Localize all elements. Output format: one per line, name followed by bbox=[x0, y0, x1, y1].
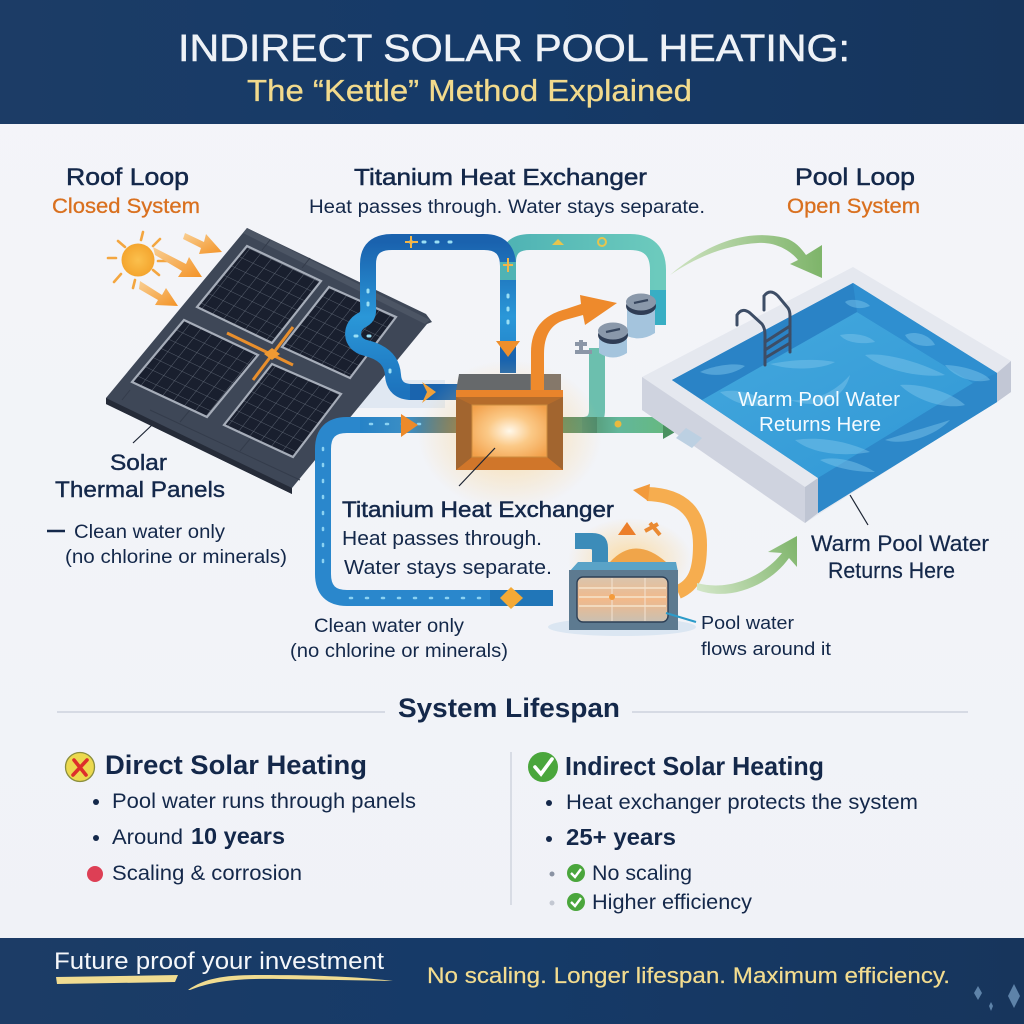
note: pool water flows around it: flows around it bbox=[701, 639, 831, 659]
ripples bbox=[700, 300, 990, 472]
pipe bbox=[575, 533, 608, 562]
slogan: No scaling. Longer lifespan. Maximum efficiency. bbox=[427, 963, 950, 988]
panel bbox=[224, 364, 341, 457]
bullet: 25+ years bbox=[566, 824, 676, 850]
canister large bbox=[626, 294, 656, 338]
heat icons bbox=[618, 522, 636, 535]
label: warm pool water: Returns Here bbox=[828, 558, 955, 583]
sparkles bbox=[974, 984, 1020, 1011]
roof bbox=[106, 228, 432, 494]
shadow bbox=[548, 618, 696, 636]
swoosh underline bbox=[56, 975, 393, 990]
swimming pool: Returns Here bbox=[759, 414, 881, 436]
bullet bbox=[93, 823, 285, 849]
text block: titanium heat exchanger bbox=[342, 497, 614, 579]
green arrow to pool from unit bbox=[697, 536, 797, 594]
box front bbox=[456, 390, 563, 470]
note: clean water only (middle) bbox=[290, 616, 508, 662]
arrow bbox=[496, 341, 520, 357]
text block: titanium heat exchanger: Heat passes through. bbox=[342, 528, 542, 550]
note: clean water only (middle): Clean water only bbox=[314, 616, 465, 637]
label: warm pool water bbox=[811, 531, 989, 583]
panel: indirect solar heating bbox=[528, 751, 918, 914]
icon: red x bbox=[66, 752, 94, 782]
panel connector bbox=[227, 327, 293, 380]
teal feed into outflow bbox=[582, 348, 597, 425]
pointer line: pool bbox=[850, 495, 868, 525]
note: pool water flows around it bbox=[701, 613, 831, 659]
small heat exchanger unit bbox=[548, 484, 700, 636]
heading: Direct Solar Heating bbox=[105, 750, 367, 780]
green arrow into pool bbox=[670, 235, 822, 278]
heading: Indirect Solar Heating bbox=[565, 751, 824, 781]
heading: roof loop: Closed System bbox=[52, 195, 200, 218]
panel: direct solar heating bbox=[66, 750, 416, 885]
arrow bbox=[500, 587, 523, 609]
bullet: Scaling & corrosion bbox=[112, 862, 302, 885]
reflection under roof bbox=[352, 380, 445, 408]
bullet: Around bbox=[112, 826, 183, 849]
label: warm pool water: Warm Pool Water bbox=[811, 531, 989, 556]
inlet plate bbox=[676, 428, 702, 448]
note: clean water only: (no chlorine or minerals) bbox=[65, 547, 287, 568]
valve bbox=[575, 340, 590, 352]
blue pipe bbox=[353, 242, 508, 392]
bullet: Pool water runs through panels bbox=[112, 790, 416, 813]
label: solar thermal panels: Thermal Panels bbox=[55, 477, 225, 502]
text block: titanium heat exchanger: Water stays separate. bbox=[344, 557, 552, 579]
heat glow bbox=[568, 518, 692, 602]
heading: system lifespan: System Lifespan bbox=[398, 693, 620, 723]
heading: pool loop bbox=[787, 164, 920, 218]
filter canisters bbox=[575, 294, 656, 358]
heat exchanger box bbox=[456, 374, 563, 470]
heading: titanium heat exchanger: Titanium Heat Exchanger bbox=[354, 164, 647, 190]
text block: titanium heat exchanger: Titanium Heat Exchanger bbox=[342, 497, 614, 522]
deck bbox=[642, 267, 1011, 523]
orange return arrow bbox=[647, 494, 700, 592]
bullet: Heat exchanger protects the system bbox=[566, 791, 918, 814]
panel bbox=[132, 320, 258, 417]
panel bbox=[197, 246, 321, 343]
heat glow bbox=[418, 360, 602, 510]
arrow bbox=[422, 382, 436, 403]
bullet: No scaling bbox=[592, 862, 692, 885]
icon: green check bbox=[528, 752, 558, 782]
outflow pipe to pool bbox=[563, 413, 684, 439]
body bbox=[569, 562, 678, 572]
heading: titanium heat exchanger bbox=[309, 164, 705, 218]
water label: Warm Pool Water bbox=[738, 389, 900, 411]
panel bbox=[282, 287, 396, 378]
bullet: Higher efficiency bbox=[592, 891, 753, 914]
bullet bbox=[550, 862, 692, 885]
heat fins bbox=[610, 548, 666, 562]
heading: titanium heat exchanger: Heat passes through. Water stays separate. bbox=[309, 197, 705, 218]
heading: roof loop: Roof Loop bbox=[66, 164, 189, 191]
heading: pool loop: Open System bbox=[787, 195, 920, 218]
lower blue pipe bbox=[323, 414, 553, 609]
box top bbox=[456, 374, 561, 391]
header banner bbox=[0, 0, 1024, 124]
swimming pool bbox=[642, 267, 1011, 523]
note: clean water only: Clean water only bbox=[74, 522, 226, 543]
label: solar thermal panels: Solar bbox=[110, 450, 167, 475]
callout line bbox=[666, 613, 696, 622]
subtitle: The “Kettle” Method Explained bbox=[247, 73, 692, 108]
pointer line: heat exchanger bbox=[459, 448, 495, 486]
note: pool water flows around it: Pool water bbox=[701, 613, 794, 633]
connector centre bbox=[264, 348, 280, 360]
upper blue pipe with teal return bbox=[353, 236, 658, 403]
heading: pool loop: Pool Loop bbox=[795, 164, 915, 191]
ladder bbox=[737, 292, 790, 365]
icon: sun bbox=[108, 232, 167, 288]
pointer line: solar panels bbox=[133, 425, 152, 443]
orange heat arrow bbox=[531, 295, 617, 390]
footer banner bbox=[0, 938, 1024, 1024]
bullet: 10 years bbox=[191, 823, 285, 849]
arrow bbox=[401, 414, 418, 437]
solar thermal panels on roof bbox=[106, 228, 432, 494]
arrow bbox=[663, 413, 684, 439]
sun rays arrows bbox=[139, 233, 222, 306]
note: clean water only (middle): (no chlorine or minerals) bbox=[290, 641, 508, 662]
label: solar thermal panels bbox=[55, 450, 225, 502]
title: INDIRECT SOLAR POOL HEATING: bbox=[178, 28, 850, 70]
note: clean water only bbox=[47, 522, 287, 568]
canister small bbox=[598, 322, 628, 358]
heading: roof loop bbox=[52, 164, 200, 218]
water bbox=[672, 283, 997, 513]
tagline: Future proof your investment bbox=[54, 948, 384, 975]
teal pipe bbox=[508, 242, 658, 318]
